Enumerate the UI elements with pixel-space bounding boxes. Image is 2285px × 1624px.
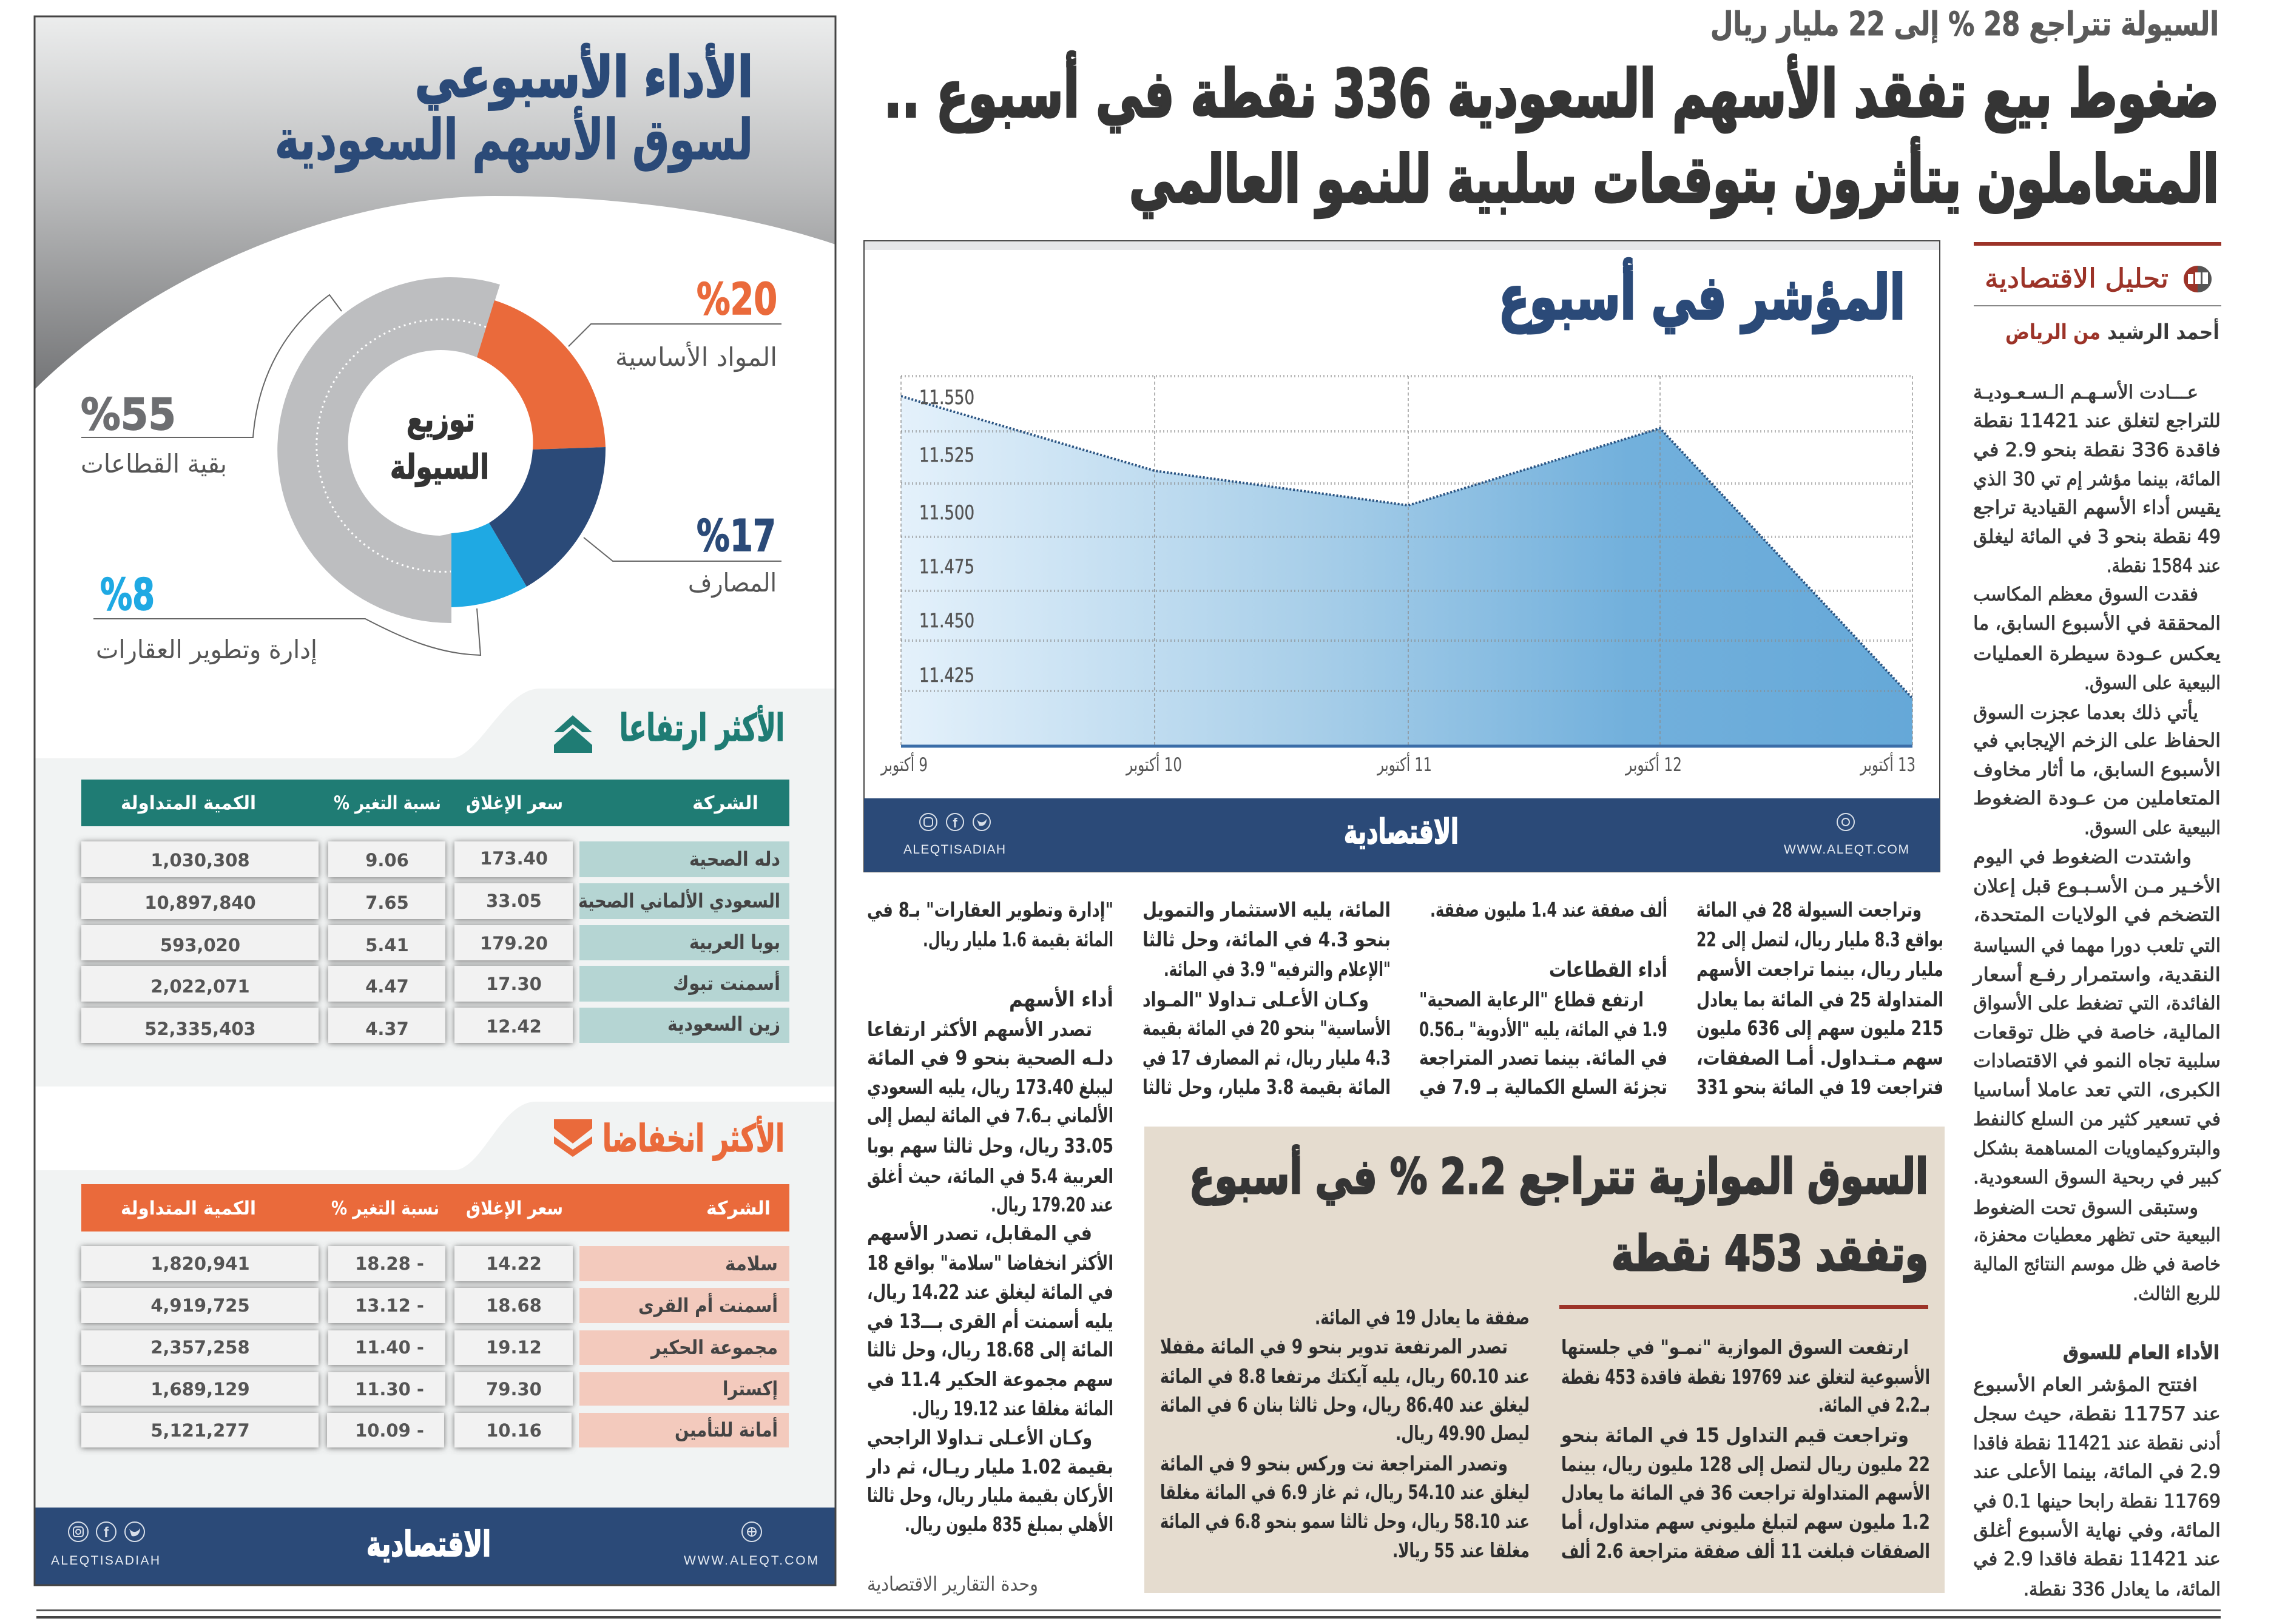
parallel market left column: صفقة ما يعادل 19 في المائة. [1315,1306,1530,1329]
section kicker: تحليل الاقتصادية [1985,263,2169,294]
text block: column D: تصدر الأسهم الأكثر ارتفاعا [867,1017,1092,1042]
gainers table header [81,780,789,826]
callout: real estate 8%: %8 [100,569,155,620]
gainers values: 12.42 [486,1016,542,1037]
losers values: 13.12 - [355,1295,424,1316]
text block: main article column: 2.9 في المائة، بينما الأعلى عند [1973,1460,2221,1483]
icon: twitter [125,1522,144,1541]
text block: column D: العربية 5.4 في المائة، حيث أغلق [867,1163,1113,1188]
losers values: 11.40 - [355,1337,424,1358]
losers company names: أسمنت أم القرى [638,1293,778,1317]
losers values: 1,689,129 [150,1379,250,1400]
parallel market right column: 1.2 مليون سهم لتبلغ مليوني سهم متداول، أما [1561,1509,1930,1534]
gainers table header: نسبة التغير % [334,792,441,814]
text block: column D: المائة مغلقا عند 19.12 ريال. [912,1397,1113,1420]
losers table header: سعر الإغلاق [466,1198,563,1219]
text block: column A: بواقع 8.3 مليار ريال، لتصل إلى 22 [1696,928,1943,952]
x axis labels: 10 أكتوبر [1126,752,1182,776]
y axis labels: 11.425 [919,664,974,687]
grey header background [35,16,835,389]
callout: real estate 8%: إدارة وتطوير العقارات [96,635,317,665]
text block: main article column: الحفاظ على الزخم الإيجابي في [1973,730,2221,752]
gainers values: 593,020 [160,935,240,955]
losers values: 10.16 [486,1420,542,1441]
gainers values: 2,022,071 [150,976,250,997]
logo wordmark: الاقتصادية [1344,812,1459,852]
losers values [150,1253,542,1441]
losers values: 14.22 [486,1253,542,1274]
parallel market right column: الأسبوعية لتغلق عند 19769 نقطة فاقدة 453 نقطة [1561,1364,1930,1389]
callout: basic materials 20%: المواد الأساسية [615,341,777,372]
text block: column D: الأهلي بمبلغ 835 مليون ريال. [905,1512,1113,1537]
callout: banks 17%: %17 [697,510,776,561]
text block: main article column: التضخم في الولايات المتحدة، [1973,904,2221,926]
text block: main article column: النقدية، واستمرار رفـع أسعار [1972,962,2221,986]
text block: main article column: يأتي ذلك بعدما عجزت السوق [1973,699,2198,724]
callout: banks 17% [584,510,781,598]
text block: column A: فتراجعت 19 في المائة بنحو 331 [1696,1075,1943,1099]
x axis labels: 9 أكتوبر [880,752,928,776]
text block: column D: أداء الأسهم [1009,985,1113,1012]
losers values: 11.30 - [355,1379,424,1400]
text block: column B: أداء القطاعات [1549,955,1667,982]
text block: column D: بقيمة 1.02 مليار ريـال، ثم دار [866,1455,1113,1478]
text block: column C: المائة بقيمة 3.8 مليار، وحل ثالثا [1142,1075,1391,1099]
callout: other sectors 55%: %55 [81,389,176,440]
callout: basic materials 20%: %20 [697,274,777,325]
text block: main article column: افتتح المؤشر العام الأسبوع [1973,1373,2198,1396]
text block: column A: وتراجعت السيولة 28 في المائة [1696,898,1922,922]
text block: main article column: فقدت السوق معظم المكاسب [1973,584,2198,605]
donut centre label [390,400,489,487]
parallel market headline [1189,1145,1928,1282]
donut centre label: السيولة [390,448,489,487]
panel title [275,44,753,173]
icon: facebook [947,814,964,831]
y axis labels: 11.525 [919,443,974,467]
text block: main article column: 11769 نقطة رابحا حينها 0.1 في [1973,1491,2221,1512]
icon: bar chart badge [2184,266,2212,292]
text block: main article column: للربع الثالث. [2133,1283,2221,1305]
parallel market right column: بـ2.2 في المائة. [1818,1393,1930,1417]
callout: basic materials 20% [569,274,781,372]
text block: main article column: والبتروكيماويات المساهمة بشكل [1973,1137,2221,1159]
footer band: chart [864,798,1940,872]
icon: double down chevron [554,1119,592,1157]
text block: column D: المائة بقيمة 1.6 مليار ريال. [923,928,1113,951]
parallel market headline: السوق الموازية تتراجع 2.2 % في أسبوع [1189,1145,1928,1205]
icon: facebook: f [104,1525,109,1541]
callout: real estate 8% [93,569,481,665]
gainers values: 17.30 [486,974,542,994]
icon: globe [742,1522,761,1541]
losers values: 18.68 [486,1295,542,1316]
parallel market left column: عند 60.10 ريال، يليه آيكتك مرتفعا 8.8 في المائة [1160,1364,1530,1389]
text block: column D: يليه أسمنت أم القرى بـــ13 في [867,1308,1113,1333]
text block: main article column: 49 نقطة بنحو 3 في المائة ليغلق [1973,526,2221,548]
losers values: 4,919,725 [150,1295,250,1316]
text block: column C [1142,898,1391,1099]
losers company names: سلامة [725,1252,778,1275]
footer band: infographic [35,1508,835,1585]
losers heading: الأكثر انخفاضا [602,1116,785,1161]
text block: main article column: عند 11421 نقطة فاقدا 2.9 في [1973,1548,2221,1570]
panel: index chart [864,241,1940,872]
gainers values: 33.05 [486,891,542,911]
social handle: ALEQTISADIAH [51,1554,160,1568]
social handle: ALEQTISADIAH [903,843,1005,857]
text block: column D: في المقابل، تصدر الأسهم [867,1221,1092,1245]
text block: column D: وكـان الأعـلى تـداولا الراجحي [867,1425,1092,1450]
section: top gainers [35,689,835,1087]
text block: main article column: المائة، بينما مؤشر إم تي 30 الذي [1973,468,2221,490]
y axis labels [919,386,974,687]
text block: column B: ارتفع قطاع "الرعاية الصحية" [1419,988,1644,1012]
losers values: 79.30 [486,1379,542,1400]
icon: facebook: f [953,815,957,831]
gainers values: 9.06 [365,850,409,871]
losers company names: مجموعة الحكير [650,1336,778,1359]
parallel market left column: عند 58.10 ريال، وحل ثالثا سمو بنحو 6.8 في المائة [1160,1509,1530,1534]
y axis labels: 11.450 [919,609,974,632]
parallel market left column: تصدر المرتفعة تدوير بنحو 9 في المائة مقفلا [1160,1335,1508,1359]
text block: column C: وكـان الأعـلى تـداولا "المـواد [1142,987,1369,1012]
gainers values: 10,897,840 [144,892,256,913]
text block: column B [1419,897,1667,1099]
text block: column D: عند 179.20 ريال. [991,1193,1113,1216]
text block: column B: تجزئة السلع الكمالية بـ 7.9 في [1419,1075,1667,1099]
gainers company names: أسمنت تبوك [673,971,780,995]
section rule: analysis [1974,242,2221,246]
logo wordmark: الاقتصادية [366,1523,491,1565]
losers values: 2,357,258 [150,1337,250,1358]
text block: main article column: الأداء العام للسوق [2063,1341,2219,1364]
text block: main article column: المائة، وفي نهاية الأسبوع أغلق [1973,1518,2221,1541]
losers company names [579,1246,789,1447]
panel title: الأداء الأسبوعي [415,44,753,110]
y axis labels: 11.475 [919,555,974,578]
text block: main article column: البيعية حتى تظهر معطيات محفزة، [1973,1224,2221,1246]
x axis labels [880,752,1915,776]
losers table header [81,1184,789,1231]
gainers company names: بوبا العربية [689,931,780,954]
parallel market right column: الصفقات فبلغت 11 ألف صفقة متراجعة 2.6 ألف [1561,1538,1930,1563]
text block: column D: الأكثر انخفاضا "سلامة" بواقع 18 [867,1250,1113,1275]
parallel market right column: الأسهم المتداولة تراجعت 36 في المائة ما يعادل [1561,1480,1930,1505]
text block: main article column: المائة، ما يعادل 336 نقطة. [2023,1579,2221,1600]
icon: instagram [920,814,937,831]
parallel market left column: ليصل 49.90 ريال. [1396,1421,1530,1445]
parallel market left column: مغلقا عند 55 ريالا. [1392,1538,1530,1562]
text block: column D: الأركان بقيمة مليار ريال، وحل ثالثا [867,1483,1113,1508]
x axis labels: 13 أكتوبر [1860,752,1915,776]
area chart [901,376,1912,746]
text block: column D: 33.05 ريال، وحل ثالثا سهم بوبا [867,1134,1113,1158]
section: top losers [35,1102,835,1508]
text block: main article column: يقيس أداء الأسهم القيادية تراجع [1973,495,2221,519]
callout: other sectors 55% [81,295,342,479]
byline [2005,318,2219,345]
gainers values: 7.65 [365,892,409,913]
gainers values: 173.40 [480,848,548,869]
text block: column D [866,898,1113,1537]
callout: banks 17%: المصارف [688,568,777,598]
parallel market right column: ارتفعت السوق الموازية "نمـو" في جلستها [1561,1335,1909,1360]
losers values: 18.28 - [355,1253,424,1274]
website: WWW.ALEQT.COM [1784,843,1909,857]
text block: column D: دلـه الصحية بنحو 9 في المائة [867,1046,1113,1070]
text block: main article column: في تسعير كثير من السلع كالنفط [1973,1108,2221,1130]
text block: main article column: الفائدة، التي تضغط على الأسواق [1973,991,2221,1014]
text block: main article column [1972,380,2221,1600]
text block: column B: ألف صفقة عند 1.4 مليون صفقة. [1430,897,1667,922]
gainers company names: دله الصحية [689,847,780,871]
text block: column C: بنحو 4.3 في المائة، وحل ثالثا [1142,928,1391,952]
text block: column D: المائة إلى 18.68 ريال، وحل ثالثا [867,1338,1113,1362]
parallel market right column: وتراجعت قيم التداول 15 في المائة بنحو [1560,1423,1909,1447]
losers values: 5,121,277 [150,1420,250,1441]
gainers values: 5.41 [365,935,409,955]
main headline [884,52,2219,218]
text block: main article column: البيعية على السوق. [2084,817,2221,839]
text block: column D: ليبلغ 173.40 ريال، يليه السعودي [867,1075,1113,1099]
gainers values: 52,335,403 [144,1019,256,1039]
text block: main article column: سلبية تجاه النمو في الاقتصادات [1973,1050,2221,1072]
text block: column C: الأساسية" بنحو 20 في المائة بقيمة [1142,1016,1391,1040]
text block: main article column: الكبرى، التي تعد عاملا أساسيا [1973,1077,2221,1101]
parallel market left column: ليغلق عند 86.40 ريال، وحل ثالثا بنان 6 في المائة [1160,1393,1530,1417]
parallel market right column: 22 مليون ريال لتصل إلى 128 مليون ريال، بينما [1561,1452,1930,1477]
text block: main article column: أدنى نقطة عند 11421 نقطة فاقدا [1973,1430,2221,1454]
y axis labels: 11.500 [919,501,974,524]
text block: column A: 215 مليون سهم إلى 636 مليون [1696,1016,1943,1040]
text block: column D: سهم مجموعة الحكير 11.4 في [867,1367,1113,1392]
donut chart: liquidity distribution [277,277,606,623]
losers values: 19.12 [486,1337,542,1358]
losers table header: نسبة التغير % [331,1198,439,1219]
text block: main article column: المالية، خاصة في ظل توقعات [1973,1022,2221,1043]
text block: column B: في المائة. بينما تصدر المتراجعة [1419,1046,1667,1070]
parallel market right column [1560,1335,1930,1563]
text block: main article column: الأخـير مـن الأسـبـوع قبل إعلان [1973,874,2221,897]
panel: parallel market [1144,1127,1945,1593]
icon: facebook [96,1522,116,1541]
parallel market left column: وتصدر المتراجعة نت وركس بنحو 9 في المائة [1160,1452,1508,1476]
gainers heading: الأكثر ارتفاعا [619,705,785,750]
text block: column A: مليار ريال، بينما تراجعت الأسهم [1696,957,1943,982]
panel title: لسوق الأسهم السعودية [275,106,753,173]
text block: column D: الألماني بـ7.6 في المائة ليصل إلى [867,1103,1113,1128]
text block: column C: المائة، يليه الاستثمار والتمويل [1142,898,1391,922]
text block: main article column: عند 11757 نقطة، حيث سجل [1973,1403,2221,1425]
text block: column C: "الإعلام والترفيه" 3.9 في المائة. [1164,957,1391,982]
parallel market left column [1160,1306,1530,1562]
losers table cells [81,1246,573,1447]
gainers values [144,848,548,1039]
losers values: 1,820,941 [150,1253,250,1274]
byline: أحمد الرشيد [2107,318,2219,345]
gainers values: 179.20 [480,933,548,954]
text block: column A [1696,898,1943,1099]
icon: twitter [973,814,990,831]
losers company names: أمانة للتأمين [675,1417,778,1441]
text block: main article column: خاصة في ظل موسم النتائج المالية [1973,1253,2221,1275]
gainers values: 4.47 [365,976,409,997]
gainers table header: سعر الإغلاق [466,792,563,814]
icon: instagram [69,1522,88,1541]
gainers company names: زين السعودية [667,1012,780,1036]
text block: main article column: كبير في ربحية السوق السعودية. [1973,1167,2221,1188]
text block: main article column: يعكس عـودة سيطرة العمليات [1973,643,2221,665]
y axis labels: 11.550 [919,386,974,409]
parallel market headline: وتفقد 453 نقطة [1612,1225,1928,1282]
losers table header: الكمية المتداولة [121,1198,256,1219]
text block: column D: في المائة ليغلق عند 14.22 ريال، [867,1280,1113,1304]
icon: double up chevron [554,715,592,753]
credit line: وحدة التقارير الاقتصادية [867,1572,1038,1595]
chart title: المؤشر في أسبوع [1499,258,1905,334]
gainers values: 1,030,308 [150,850,250,871]
text block: main article column: واشتدت الضغوط في اليوم [1973,846,2192,868]
callout: other sectors 55%: بقية القطاعات [81,449,227,479]
losers company names: إكسترا [723,1377,778,1401]
text block: main article column: للتراجع لتغلق عند 11421 نقطة [1973,410,2221,432]
donut centre label: توزيع [407,400,475,440]
website: WWW.ALEQT.COM [684,1554,818,1568]
gainers company names: السعودي الألماني الصحية [578,889,780,912]
panel: weekly performance infographic [35,16,835,1585]
losers table header: الشركة [706,1198,771,1219]
x axis labels: 11 أكتوبر [1377,752,1432,776]
text block: column D: "إدارة وتطوير العقارات" بـ8 في [867,898,1113,922]
gainers values: 4.37 [365,1019,409,1039]
subheadline: السيولة تتراجع 28 % إلى 22 مليار ريال [1710,5,2219,43]
text block: column B: 1.9 في المائة، يليه "الأدوية" بـ0.56 [1419,1017,1667,1042]
text block: column A: سهم مـتـداول. أمـا الصفقات، [1696,1045,1943,1070]
text block: main article column: وستبقى السوق تحت الضغوط [1973,1197,2198,1219]
icon: globe [1837,814,1854,831]
gainers company names [578,841,789,1043]
gainers table header: الكمية المتداولة [121,792,256,814]
text block: main article column: المتعاملين من عـودة الضغوط [1973,787,2221,809]
text block: main article column: الأسبوع السابق، ما أثار مخاوف [1973,757,2221,781]
text block: main article column: فاقدة 336 نقطة بنحو 2.9 في [1973,439,2221,461]
text block: column A: المتداولة 25 في المائة بما يعادل [1696,988,1943,1012]
gainers table cells [81,841,573,1043]
losers values: 10.09 - [355,1420,424,1441]
byline: من الرياض [2005,320,2101,345]
text block: main article column: عـــادت الأسـهـم الـسـعـوديـة [1973,380,2198,403]
text block: main article column: المحققة في الأسبوع السابق، ما [1973,612,2221,635]
gainers table header: الشركة [692,792,758,814]
x axis labels: 12 أكتوبر [1624,752,1682,776]
text block: main article column: البيعية على السوق. [2084,672,2221,694]
text block: main article column: التي تلعب دورا مهما في السياسة [1973,935,2221,957]
text block: main article column: عند 1584 نقطة. [2107,555,2221,577]
parallel market left column: ليغلق عند 54.10 ريال، ثم غاز 6.9 في المائة مغلقا [1160,1480,1530,1504]
text block: column C: 4.3 مليار ريال، ثم المصارف 17 في [1142,1046,1391,1070]
